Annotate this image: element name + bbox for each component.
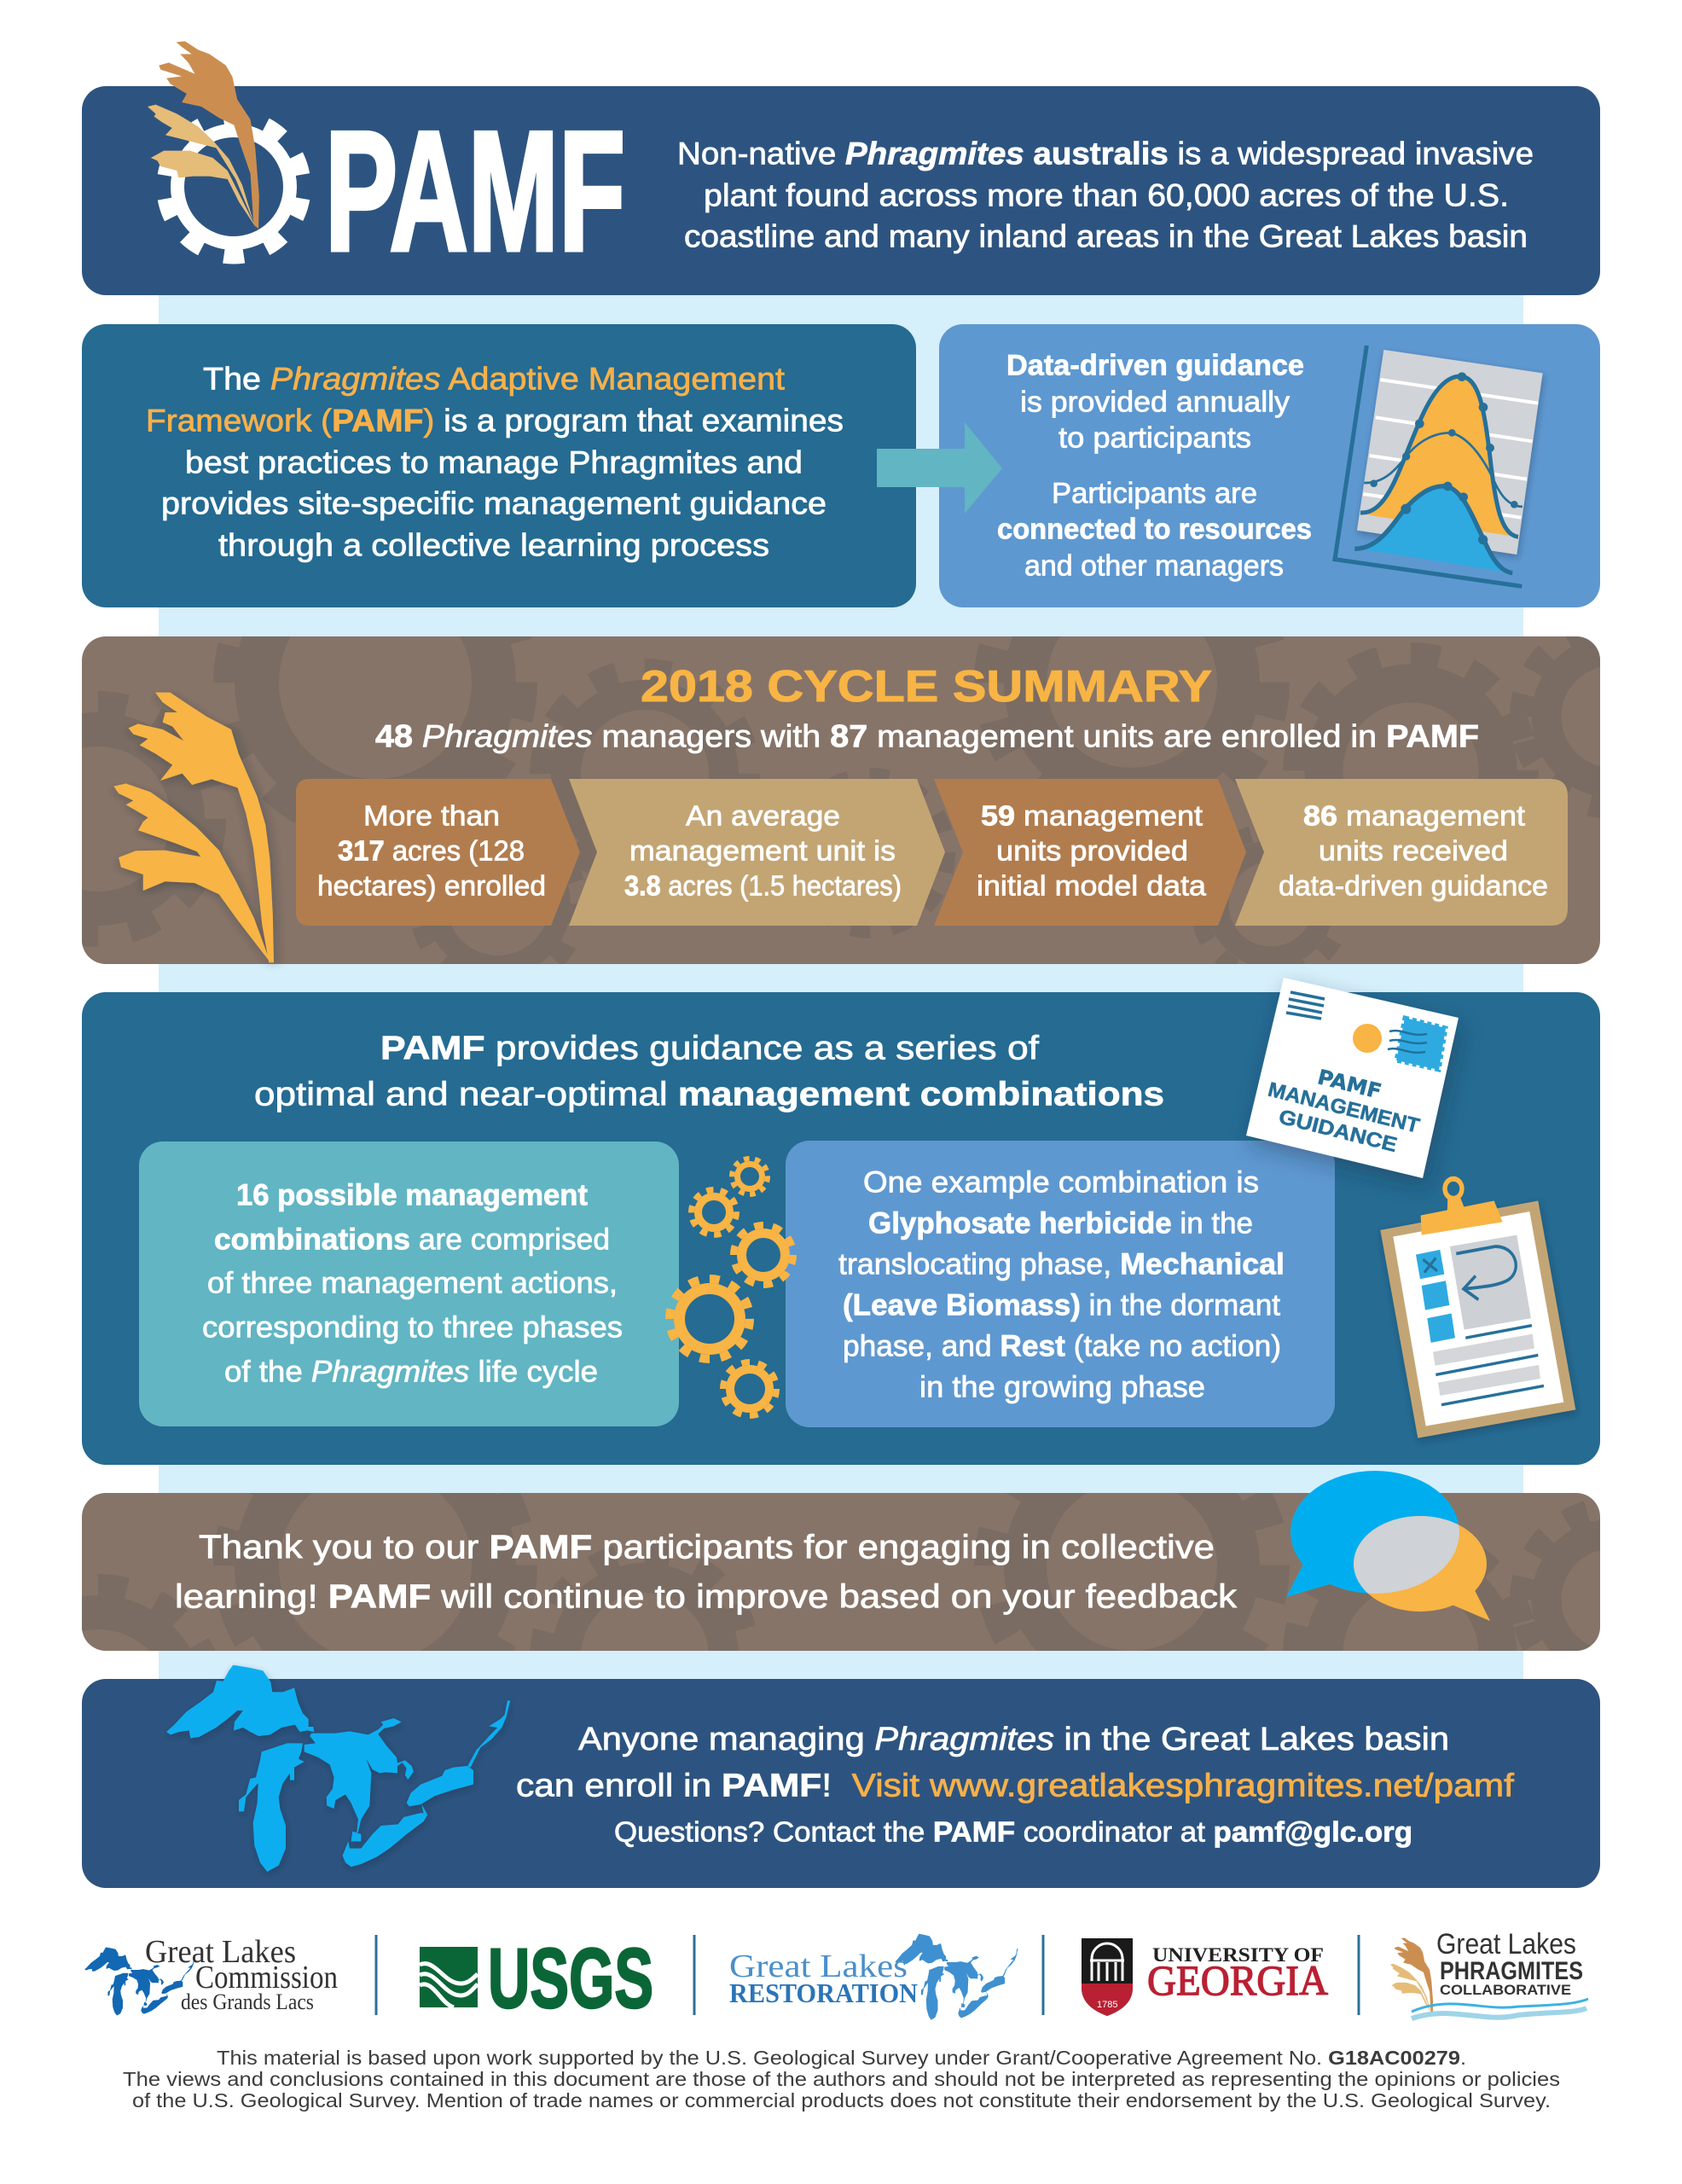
chevron: model data: initial model data <box>977 870 1207 901</box>
icon: envelope: MANAGEMENT <box>1266 1078 1422 1138</box>
call to action text: Anyone managing Phragmites in the Great Lakes basin <box>578 1722 1449 1757</box>
logo: USGS <box>420 1931 653 2025</box>
panel: thank you <box>82 1471 1600 1651</box>
card: example combination: One example combination is <box>863 1165 1259 1199</box>
panel: PAMF definition: through a collective learning process <box>218 527 769 563</box>
logo: Great Lakes Phragmites Collaborative: PHRAGMITES <box>1440 1957 1583 1985</box>
panel: enroll call to action <box>82 1665 1600 1888</box>
logo: USGS: USGS <box>488 1931 653 2025</box>
call to action text <box>516 1722 1514 1848</box>
chevron: average unit <box>569 779 945 926</box>
chevron: average unit: 3.8 acres (1.5 hectares) <box>624 870 902 901</box>
card: example combination: (Leave Biomass) in the dormant <box>843 1288 1280 1322</box>
footer disclaimer: of the U.S. Geological Survey. Mention of trade names or commercial products does not constitute their endorsement by the U.S. Geological Survey. <box>132 2089 1551 2111</box>
chevron: acres enrolled: 317 acres (128 <box>338 834 525 867</box>
footer disclaimer: The views and conclusions contained in this document are those of the authors and should not be interpreted as representing the opinions or policies <box>123 2068 1560 2090</box>
icon: yellow gears <box>670 1159 793 1416</box>
plant illustration <box>113 693 274 962</box>
panel: guidance benefits: is provided annually <box>1020 386 1290 418</box>
card: example combination <box>786 1141 1335 1427</box>
chevron: guidance received: data-driven guidance <box>1279 870 1548 901</box>
card: possible combinations: 16 possible management <box>236 1179 588 1211</box>
chevron: model data <box>934 779 1246 926</box>
logo: Great Lakes Phragmites Collaborative <box>1390 1928 1588 2018</box>
logo: Great Lakes Phragmites Collaborative: COLLABORATIVE <box>1440 1982 1571 1998</box>
logo: University of Georgia <box>1082 1938 1328 2016</box>
panel: guidance benefits: to participants <box>1058 421 1251 454</box>
thank you text <box>175 1529 1238 1616</box>
logo: Great Lakes Commission: des Grands Lacs <box>181 1989 314 2014</box>
card: possible combinations <box>139 1141 679 1426</box>
panel: guidance benefits: and other managers <box>1024 549 1284 582</box>
icon: clipboard <box>1380 1179 1575 1438</box>
light blue backdrop <box>159 295 1523 1679</box>
panel heading <box>254 1031 1164 1112</box>
logo: Great Lakes Commission <box>84 1934 338 2016</box>
chevron: model data: 59 management <box>981 800 1203 831</box>
card: example combination: in the growing phase <box>919 1370 1205 1404</box>
card: possible combinations: of the Phragmites life cycle <box>224 1355 598 1389</box>
header text: coastline and many inland areas in the Great Lakes basin <box>684 218 1528 254</box>
heading: 2018 CYCLE SUMMARY <box>641 662 1212 712</box>
panel heading: PAMF provides guidance as a series of <box>380 1031 1039 1066</box>
panel: guidance benefits: Participants are <box>1052 478 1257 510</box>
panel: PAMF definition: Framework ( PAMF) is a program that examines <box>146 403 844 439</box>
panel: PAMF definition: The Phragmites Adaptive Management <box>203 362 786 396</box>
footer disclaimer: This material is based upon work supported by the U.S. Geological Survey under Grant/Cooperative Agreement No. G18AC00279 . <box>217 2047 1466 2069</box>
arrow <box>877 422 1002 514</box>
panel: 2018 cycle summary <box>82 636 1600 967</box>
card: possible combinations: corresponding to three phases <box>202 1310 623 1345</box>
card: example combination: phase, and Rest (take no action) <box>843 1329 1281 1363</box>
logo: Great Lakes Restoration: RESTORATION <box>729 1978 918 2008</box>
map: Great Lakes <box>166 1665 510 1872</box>
logo: Great Lakes Phragmites Collaborative: Great Lakes <box>1436 1928 1576 1960</box>
chevron: model data: units provided <box>996 834 1188 867</box>
chevron: average unit: management unit is <box>629 834 896 867</box>
logo: Great Lakes Commission: Great Lakes <box>145 1934 296 1970</box>
logo: University of Georgia: UNIVERSITY OF <box>1152 1944 1324 1966</box>
logo: Great Lakes Commission: Commission <box>195 1960 338 1995</box>
logo: University of Georgia: GEORGIA <box>1147 1956 1328 2004</box>
panel: guidance benefits <box>939 324 1600 607</box>
logo: University of Georgia: 1785 <box>1097 2000 1117 2010</box>
chevron: guidance received: 86 management <box>1303 800 1525 831</box>
chevron: guidance received: units received <box>1319 834 1508 867</box>
logo: Great Lakes Restoration <box>729 1934 1018 2020</box>
panel: PAMF definition <box>82 324 916 607</box>
header text: Non-native Phragmites australis is a widespread invasive <box>677 136 1534 171</box>
card: example combination: translocating phase, Mechanical <box>838 1247 1285 1281</box>
icon: envelope <box>1246 978 1459 1178</box>
header text <box>677 136 1534 254</box>
card: example combination: Glyphosate herbicide in the <box>868 1206 1253 1240</box>
card: possible combinations: of three management actions, <box>207 1266 618 1300</box>
icon: envelope: PAMF <box>1315 1065 1384 1104</box>
icon: envelope: GUIDANCE <box>1276 1106 1400 1157</box>
thank you text: Thank you to our PAMF participants for engaging in collective <box>199 1529 1215 1566</box>
logo: Great Lakes Restoration: Great Lakes <box>729 1949 908 1984</box>
call to action text: can enroll in PAMF ! Visit www.greatlakesphragmites.net/pamf <box>516 1768 1514 1804</box>
icon: speech bubbles <box>1286 1471 1490 1621</box>
logo: PAMF gear and plant: PAMF <box>325 96 625 287</box>
footer disclaimer <box>123 2047 1560 2111</box>
logo: PAMF gear and plant <box>148 41 625 287</box>
chevron: acres enrolled: More than <box>363 800 500 831</box>
card: possible combinations: combinations are comprised <box>214 1223 610 1256</box>
chevron: acres enrolled <box>296 779 580 926</box>
chevron: acres enrolled: hectares) enrolled <box>317 870 546 901</box>
panel: guidance benefits: connected to resources <box>997 514 1312 546</box>
call to action text: Questions? Contact the PAMF coordinator at pamf@glc.org <box>614 1815 1412 1848</box>
chart: bell curves <box>1335 346 1543 586</box>
panel: PAMF definition: best practices to manage Phragmites and <box>185 445 803 479</box>
subheading: 48 Phragmites managers with 87 management units are enrolled in PAMF <box>375 718 1479 754</box>
panel: management combinations <box>82 978 1600 1465</box>
panel: guidance benefits: Data-driven guidance <box>1006 350 1304 382</box>
panel: PAMF definition: provides site-specific management guidance <box>161 486 826 520</box>
panel: header <box>82 41 1600 295</box>
thank you text: learning! PAMF will continue to improve based on your feedback <box>175 1578 1238 1616</box>
chevron: guidance received <box>1235 779 1568 926</box>
panel heading: optimal and near-optimal management combinations <box>254 1077 1164 1112</box>
chevron: average unit: An average <box>686 800 840 831</box>
header text: plant found across more than 60,000 acres of the U.S. <box>704 177 1509 213</box>
